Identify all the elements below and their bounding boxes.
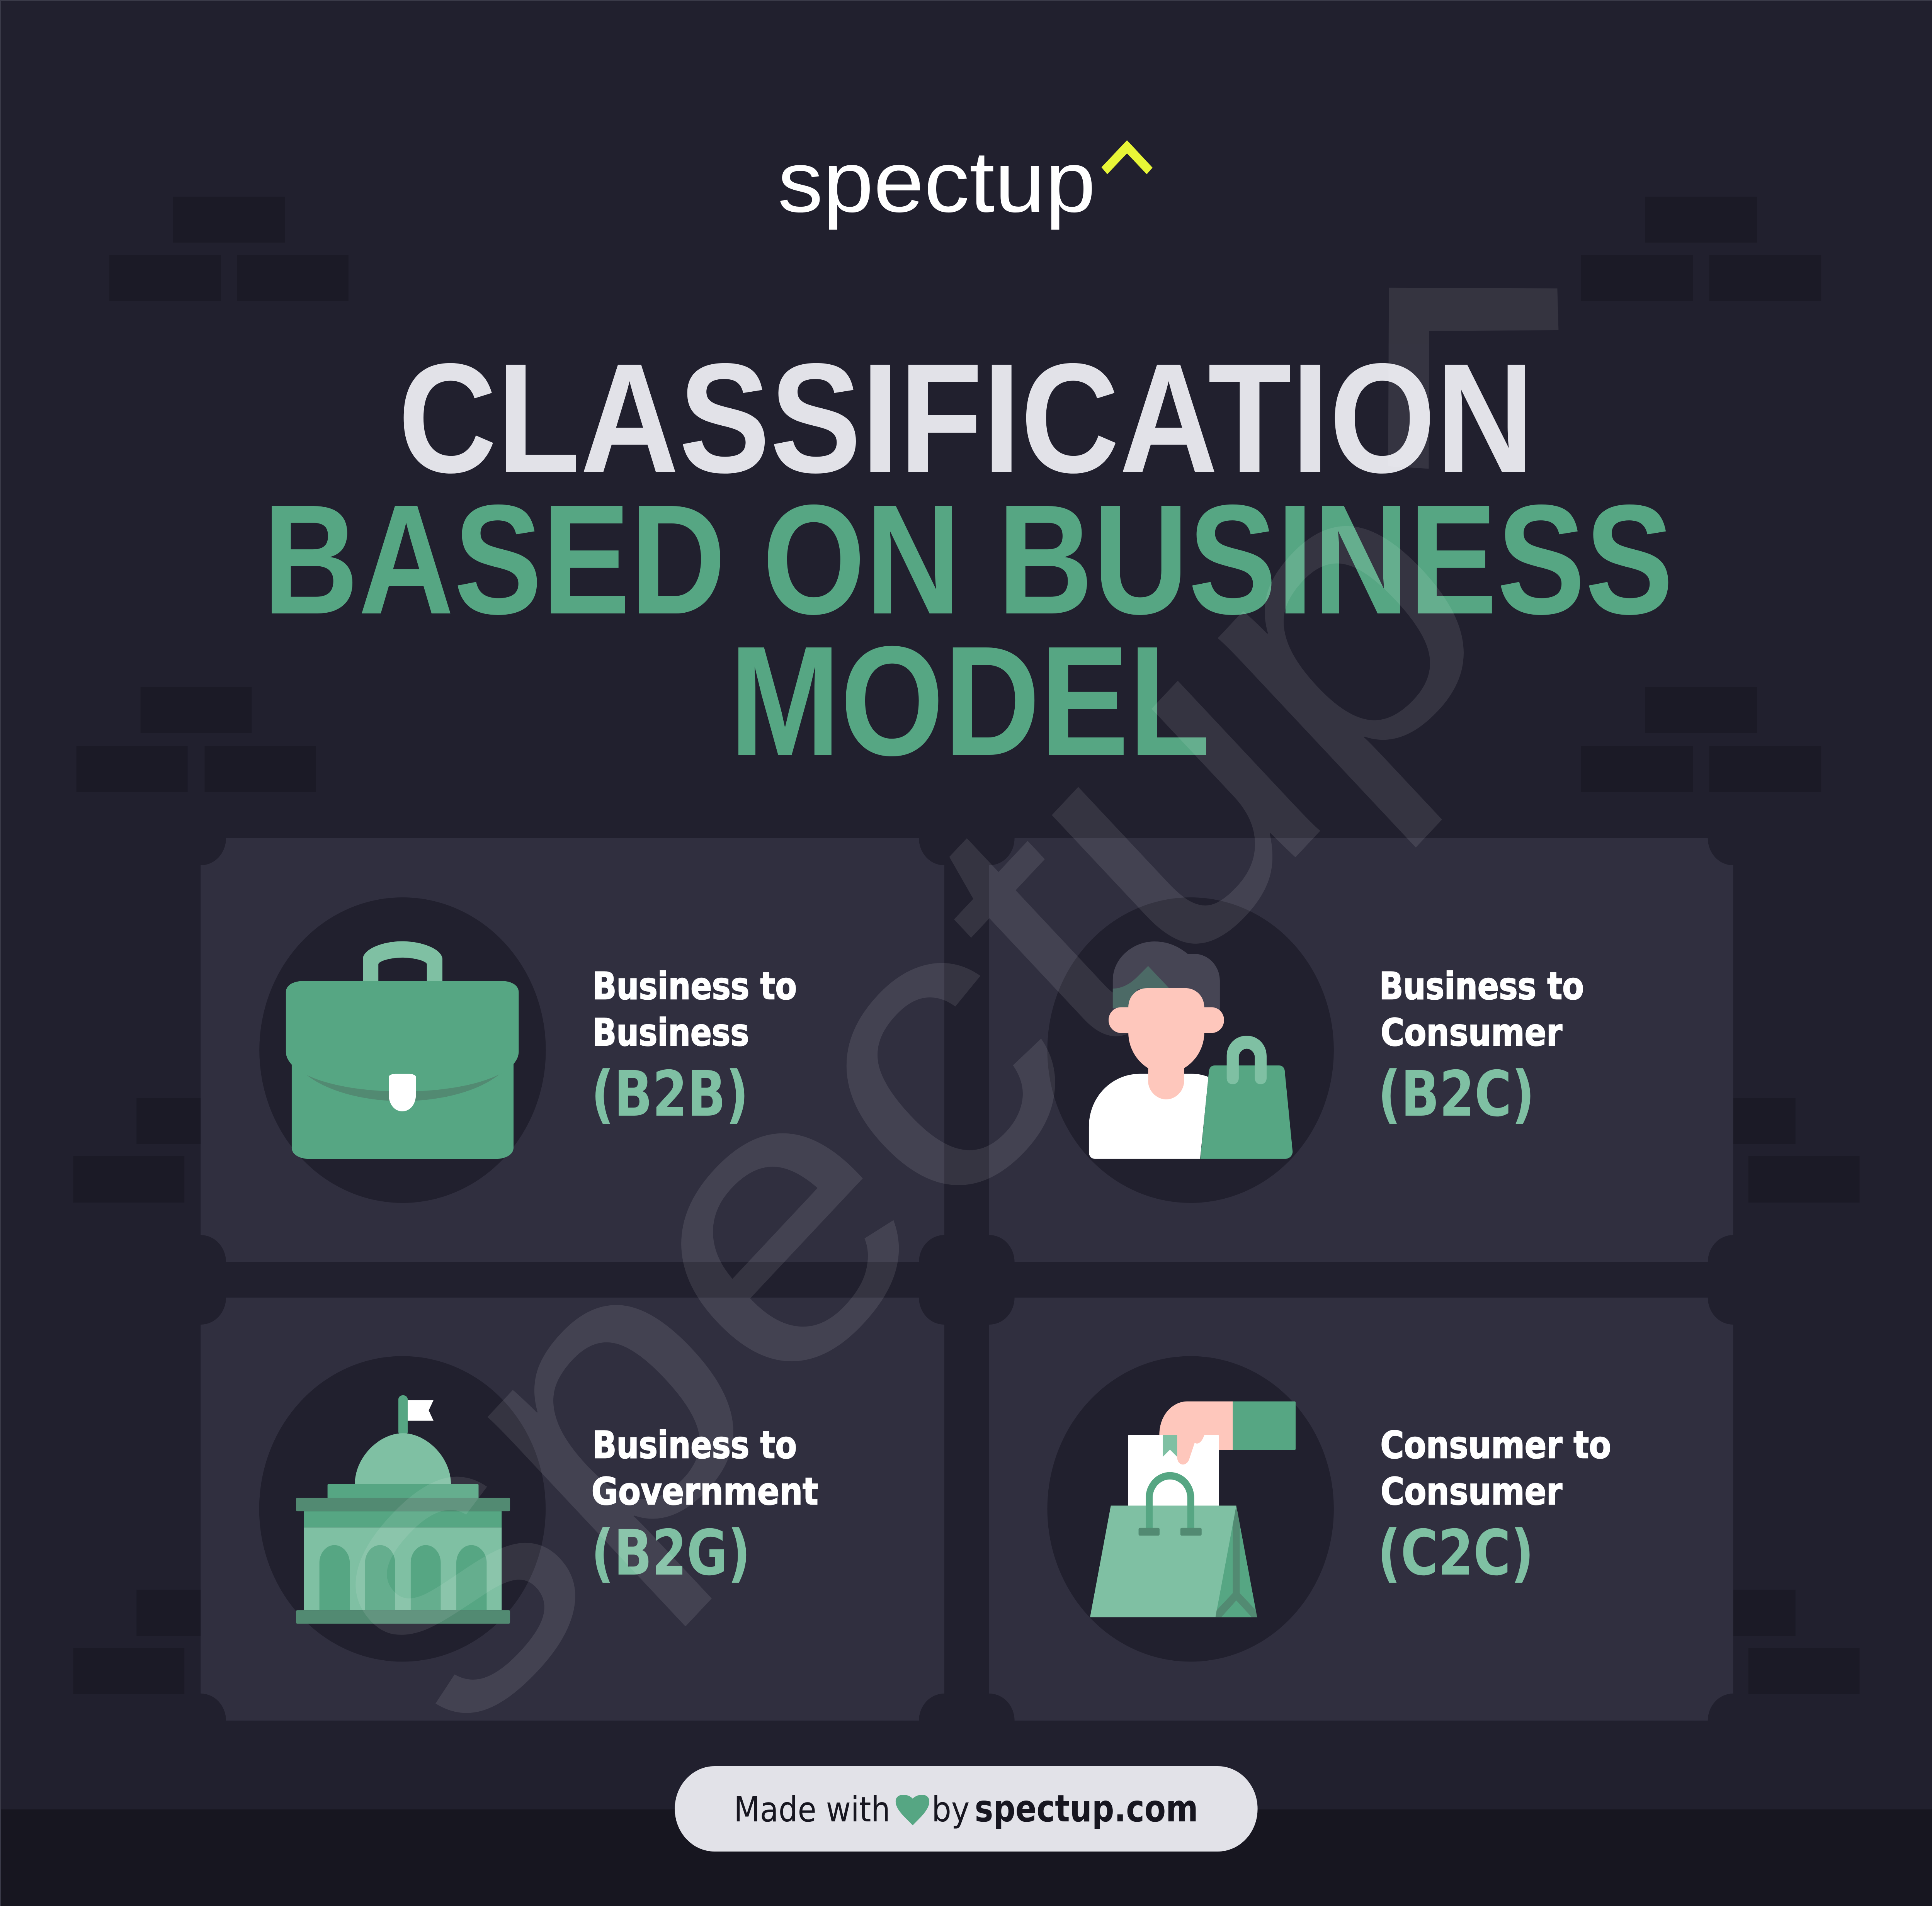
- label: Business to Business: Business to: [593, 965, 797, 1008]
- label: Business to Business: Business: [593, 1011, 749, 1054]
- label: Business to Business: [591, 965, 797, 1131]
- title: MODEL: [730, 614, 1210, 788]
- icon: B2G circle backdrop: [259, 1356, 546, 1662]
- footer pill: by: [932, 1790, 969, 1830]
- label: Business to Government: Government: [592, 1470, 818, 1513]
- bottom band: [0, 1809, 1932, 1906]
- icon: briefcase: [286, 941, 519, 1159]
- icon: heart: [896, 1795, 929, 1825]
- label: Consumer to Consumer: (C2C): [1378, 1517, 1534, 1590]
- panel: B2G: [201, 1298, 944, 1721]
- title: CLASSIFICATION: [398, 331, 1534, 505]
- title: BASED ON BUSINESS: [263, 472, 1673, 647]
- icon: person with shopping bag: [1089, 941, 1293, 1159]
- label: Business to Consumer: [1378, 965, 1584, 1131]
- label: Consumer to Consumer: [1378, 1424, 1611, 1590]
- footer pill: spectup.com: [975, 1787, 1198, 1830]
- watermark: spectup: [218, 374, 1565, 1810]
- watermark: [218, 175, 1752, 1810]
- panel: B2B: [201, 838, 944, 1262]
- label: Consumer to Consumer: Consumer to: [1380, 1424, 1611, 1467]
- icon: government building: [296, 1395, 510, 1624]
- label: Business to Government: [591, 1424, 818, 1590]
- title: [263, 331, 1673, 788]
- label: Business to Consumer: (B2C): [1378, 1058, 1535, 1131]
- background brick pattern: [73, 197, 1860, 1694]
- label: Business to Government: Business to: [593, 1424, 797, 1467]
- icon: B2C circle backdrop: [1047, 897, 1334, 1203]
- label: Business to Business: (B2B): [591, 1058, 749, 1131]
- label: Business to Consumer: Consumer: [1381, 1011, 1562, 1054]
- panel: C2C: [989, 1298, 1733, 1721]
- panel: B2C: [989, 838, 1733, 1262]
- label: Business to Government: (B2G): [591, 1517, 750, 1590]
- logo: spectup: [778, 134, 1096, 230]
- footer pill: [675, 1766, 1258, 1852]
- icon: C2C circle backdrop: [1047, 1356, 1334, 1662]
- icon: B2B circle backdrop: [259, 897, 546, 1203]
- icon: hand and shopping bag: [1090, 1401, 1296, 1617]
- label: Consumer to Consumer: Consumer: [1381, 1470, 1562, 1513]
- footer pill: Made with: [734, 1790, 890, 1830]
- label: Business to Consumer: Business to: [1379, 965, 1584, 1008]
